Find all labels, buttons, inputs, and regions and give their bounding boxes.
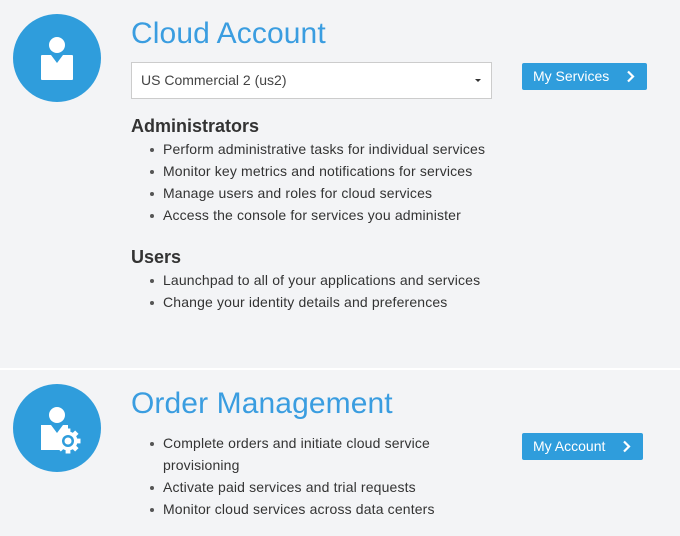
icon: user with gear [13, 384, 101, 472]
list: administrators [150, 141, 485, 223]
dropdown: US Commercial 2 (us2) [141, 72, 286, 88]
button: My Services: My Services [533, 68, 609, 84]
panel: cloud account [13, 14, 647, 310]
list: users: Launchpad to all of your applications and services [163, 272, 480, 288]
list: administrators: Monitor key metrics and notifications for services [163, 163, 472, 179]
button: My Services [522, 63, 647, 90]
list: order management: provisioning [163, 457, 240, 473]
list: users [150, 272, 480, 310]
title: Order Management: Order Management [131, 387, 393, 420]
list: users: Change your identity details and preferences [163, 294, 447, 310]
list: order management: Activate paid services and trial requests [163, 479, 416, 495]
list: order management [150, 435, 435, 517]
button: My Account: My Account [533, 438, 605, 454]
heading: Administrators: Administrators [131, 116, 259, 136]
dropdown [131, 62, 492, 99]
heading: Users: Users [131, 247, 181, 267]
list: order management: Monitor cloud services across data centers [163, 501, 435, 517]
icon: user [13, 14, 101, 102]
title: Cloud Account: Cloud Account [131, 17, 326, 50]
list: administrators: Manage users and roles for cloud services [163, 185, 432, 201]
list: administrators: Perform administrative tasks for individual services [163, 141, 485, 157]
panel: order management [13, 384, 643, 517]
button: My Account [522, 433, 643, 460]
list: order management: Complete orders and initiate cloud service [163, 435, 430, 451]
list: administrators: Access the console for services you administer [163, 207, 461, 223]
